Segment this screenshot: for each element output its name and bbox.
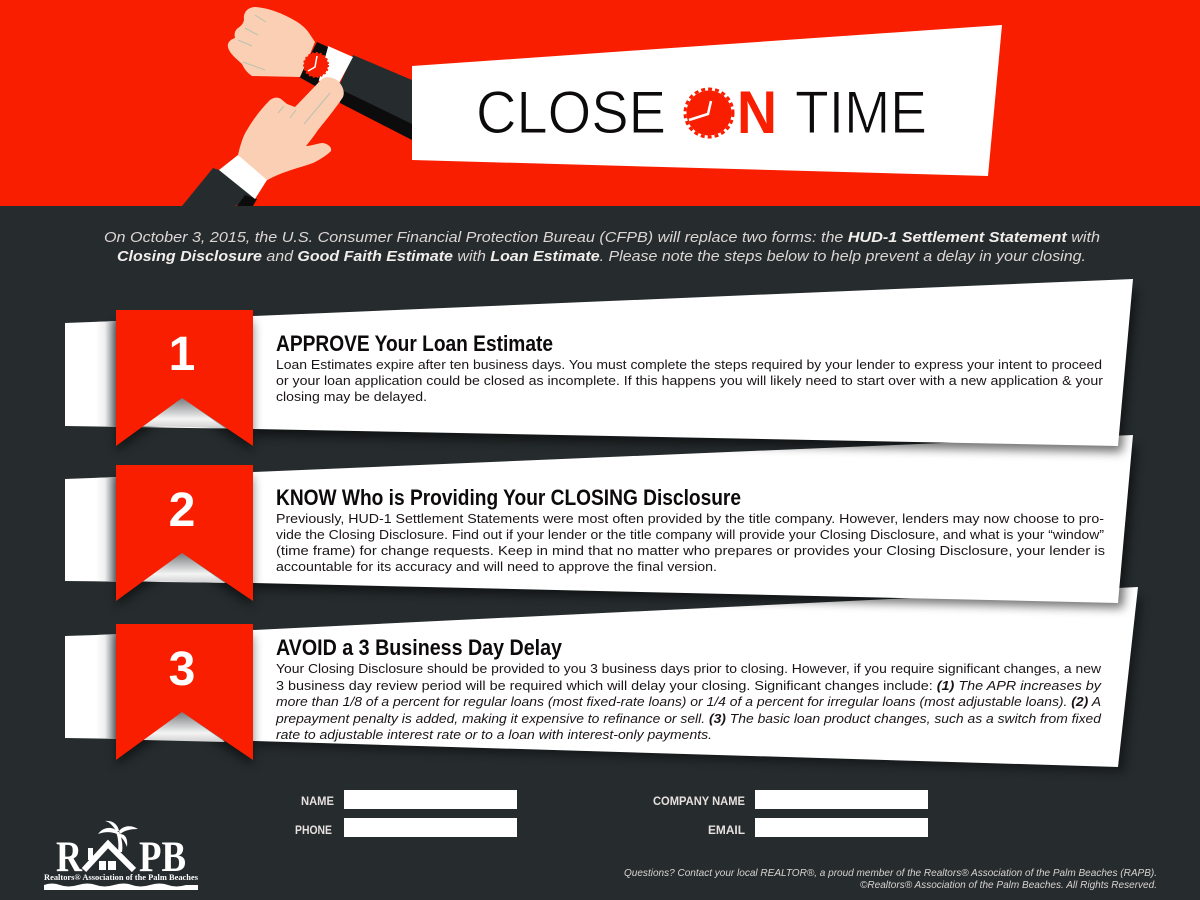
step 1 text: Loan Estimates expire after ten business days. You must complete the steps required by your lender to express your intent to proceed xyxy=(276,358,1102,372)
footer note: Questions? Contact your local REALTOR®, a proud member of the Realtors® Association of the Palm Beaches (RAPB). xyxy=(624,868,1157,879)
step 2 heading: KNOW Who is Providing Your CLOSING Disclosure xyxy=(276,485,741,510)
logo: RAPB: R xyxy=(56,834,83,881)
step 2 text: vide the Closing Disclosure. Find out if your lender or the title company will provide your Closing Disclosure, and what is your “window” xyxy=(276,528,1104,542)
field: email: EMAIL xyxy=(708,823,745,837)
contact form xyxy=(295,790,928,837)
icon: clock O xyxy=(685,89,733,137)
intro paragraph: On October 3, 2015, the U.S. Consumer Financial Protection Bureau (CFPB) will replace two forms: the HUD-1 Settlement Statement with xyxy=(104,230,1100,246)
field: company name: COMPANY NAME xyxy=(653,794,745,808)
footer note: ©Realtors® Association of the Palm Beaches. All Rights Reserved. xyxy=(860,880,1157,891)
step 2 text xyxy=(276,512,1105,574)
step 1 text xyxy=(276,358,1103,404)
step 2 text: Previously, HUD-1 Settlement Statements were most often provided by the title company. However, lenders may now choose to pro- xyxy=(276,512,1104,526)
logo: RAPB: PB xyxy=(139,834,186,881)
step 2 text: (time frame) for change requests. Keep in mind that no matter who prepares or provides your Closing Disclosure, your lender is xyxy=(276,544,1105,558)
ribbon 2: 2 xyxy=(169,484,195,537)
field: email xyxy=(708,818,928,837)
step 1 text: closing may be delayed. xyxy=(276,390,427,404)
panel: step 3 xyxy=(65,587,1142,772)
step 3 text: Your Closing Disclosure should be provided to you 3 business days prior to closing. However, if you require significant changes, a new xyxy=(276,662,1102,676)
ribbon 1 xyxy=(116,310,253,452)
field: name: NAME xyxy=(301,794,334,808)
intro paragraph: Closing Disclosure and Good Faith Estimate with Loan Estimate . Please note the steps below to help prevent a delay in your closing. xyxy=(117,249,1086,265)
panel: step 2 xyxy=(65,435,1137,608)
logo: RAPB xyxy=(44,821,198,890)
step 1 text: or your loan application could be closed as incomplete. If this happens you will likely need to start over with a new application & your xyxy=(276,374,1103,388)
title text: TIME xyxy=(795,79,927,146)
ribbon 1: 1 xyxy=(169,328,195,381)
header band xyxy=(0,0,1200,206)
field: phone: PHONE xyxy=(295,823,332,837)
icon: hands checking wristwatch xyxy=(182,7,412,206)
step 3 text: more than 1/8 of a percent for regular loans (most fixed-rate loans) or 1/4 of a percent for irregular loans (most adjustable loans). (2) A xyxy=(276,695,1101,709)
step 3 text: rate to adjustable interest rate or to a loan with interest-only payments. xyxy=(276,728,712,742)
ribbon 3 xyxy=(116,624,253,766)
footer note xyxy=(624,868,1157,891)
step 3 heading: AVOID a 3 Business Day Delay xyxy=(276,635,562,660)
logo: RAPB: Realtors® Association of the Palm Beaches xyxy=(44,873,198,882)
step 3 text: prepayment penalty is added, making it expensive to refinance or sell. (3) The basic loan product changes, such as a switch from fixed xyxy=(275,712,1102,726)
step 1 heading: APPROVE Your Loan Estimate xyxy=(276,331,553,356)
title panel xyxy=(412,25,1002,176)
step 2 text: accountable for its accuracy and will need to approve the final version. xyxy=(276,560,717,574)
field: company name xyxy=(653,790,928,809)
title text: N xyxy=(737,79,777,146)
field: phone xyxy=(295,818,517,837)
ribbon 2 xyxy=(116,465,253,607)
field: name xyxy=(301,790,517,809)
ribbon 3: 3 xyxy=(169,643,195,696)
step 3 text xyxy=(275,662,1102,742)
title text xyxy=(476,79,927,146)
title text: CLOSE xyxy=(476,79,666,146)
step 3 text: 3 business day review period will be required which will delay your closing. Significant changes include: (1) The APR increases by xyxy=(276,679,1102,693)
panel: step 1 xyxy=(65,279,1137,452)
intro paragraph xyxy=(104,230,1100,265)
